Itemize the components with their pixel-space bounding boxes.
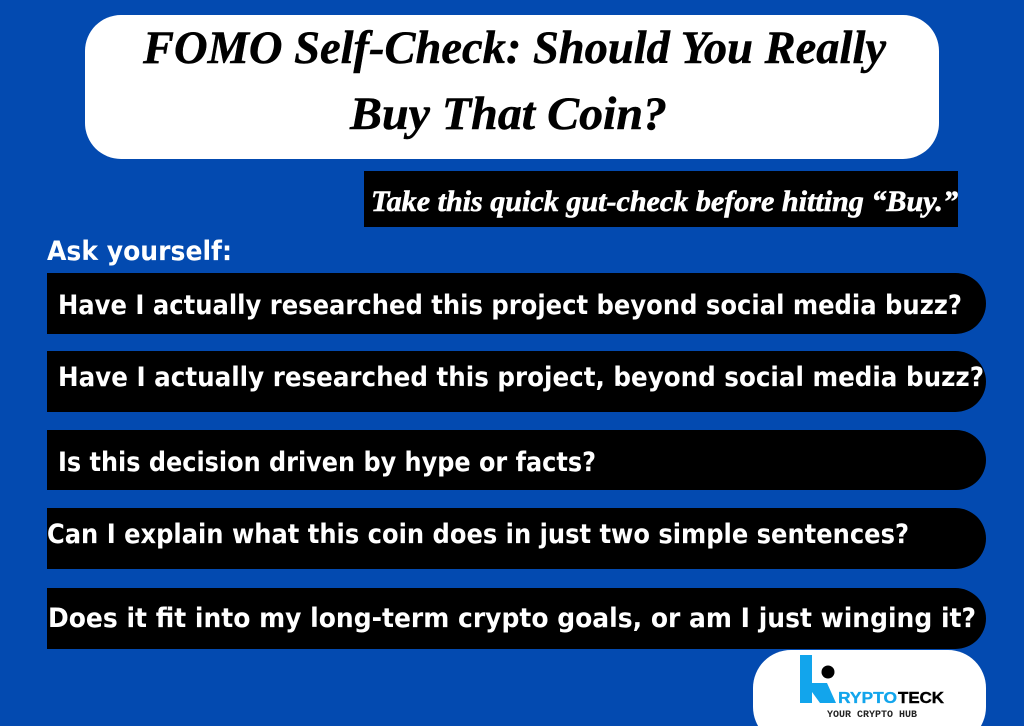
question 1: [47, 273, 986, 334]
title text: [142, 22, 886, 140]
title text: Buy That Coin?: [349, 88, 667, 140]
question 5: [47, 588, 986, 649]
subtitle banner: Take this quick gut-check before hitting “Buy.”: [371, 185, 958, 218]
logo wordmark: TECK: [898, 690, 945, 707]
heading: ask yourself: Ask yourself:: [47, 236, 232, 267]
question 4: [47, 508, 986, 569]
question 2: [47, 351, 986, 412]
subtitle banner: [364, 171, 958, 227]
logo panel: [753, 650, 986, 726]
logo wordmark: [838, 690, 945, 707]
title text: FOMO Self-Check: Should You Really: [142, 22, 886, 74]
logo tagline: YOUR CRYPTO HUB: [827, 710, 917, 721]
question 5: Does it fit into my long-term crypto goals, or am I just winging it?: [48, 603, 976, 634]
logo wordmark: RYPTO: [838, 690, 897, 707]
question 4: Can I explain what this coin does in just two simple sentences?: [47, 519, 909, 550]
question 3: [47, 430, 986, 490]
icon: K mark: [800, 655, 836, 703]
title panel: [85, 15, 939, 159]
question 3: Is this decision driven by hype or facts?: [58, 447, 596, 478]
